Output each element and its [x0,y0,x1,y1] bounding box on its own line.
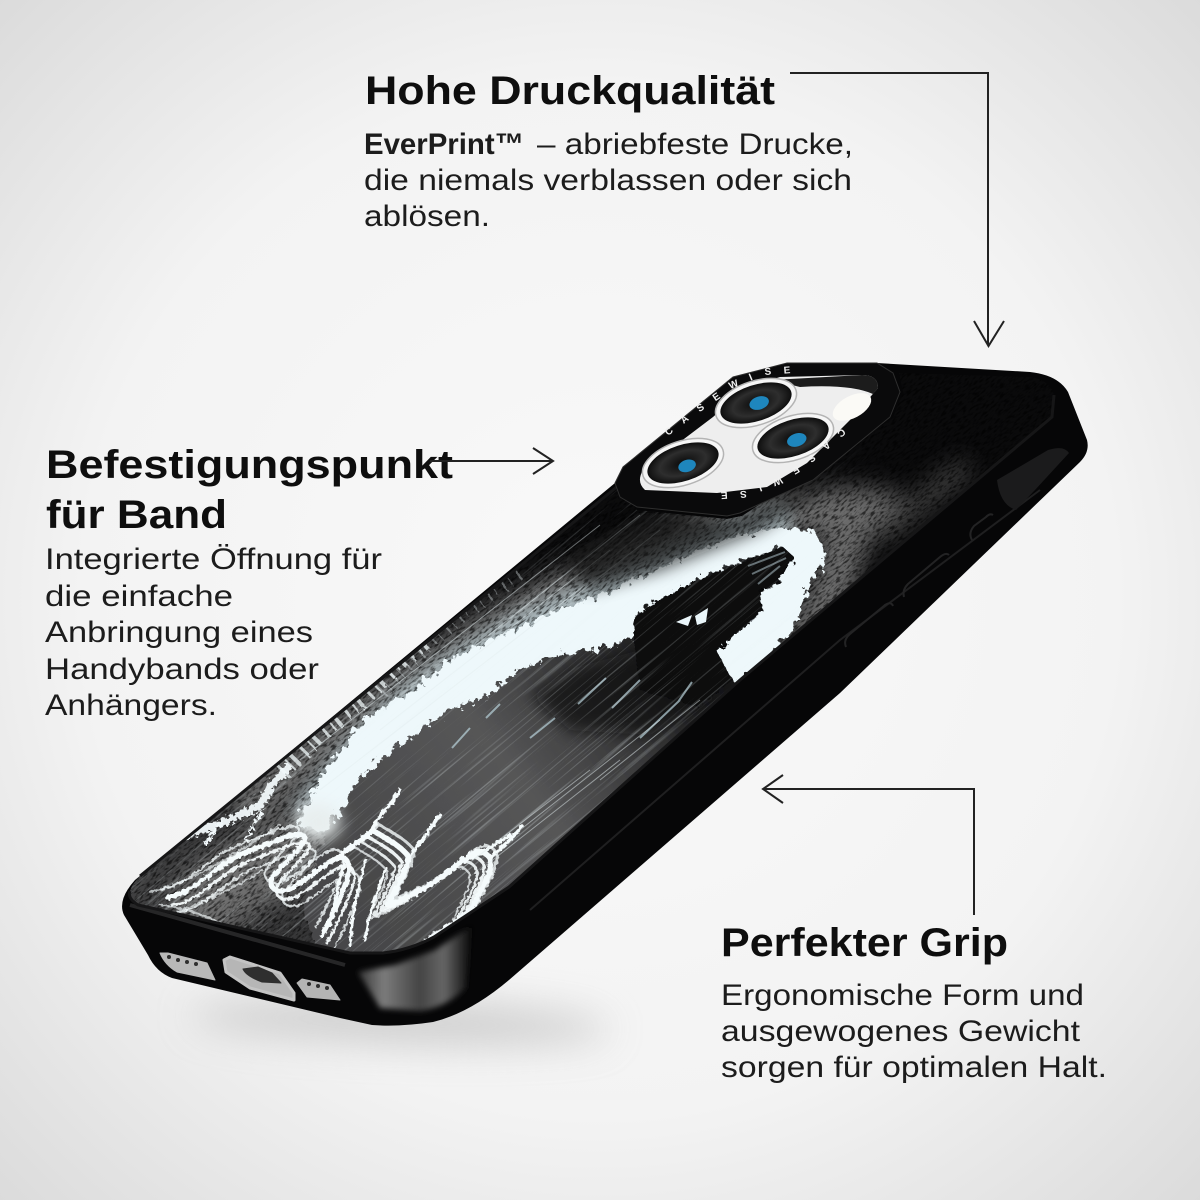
description: Handybands oder [45,653,319,686]
hooded figure [634,547,794,707]
left grill holes [167,955,198,966]
description [721,979,1107,1084]
description: die niemals verblassen oder sich [364,164,852,197]
streak highlights [300,515,700,870]
callout: strap attachment [45,443,453,722]
brand text top: CASEWISE [666,366,790,434]
right grill holes [307,982,329,990]
glow bottom bloom [296,804,340,840]
dark grain over mist [130,448,988,942]
port surround [224,957,294,1000]
rim line [530,490,1040,910]
dark fade near camera [560,470,850,590]
back print artwork [130,449,983,952]
camera control notch [997,448,1069,510]
description [364,128,853,233]
bottom rim band [130,905,345,965]
case corner highlight [358,925,472,1011]
arrow: grip [763,775,974,915]
description: – abriebfeste Drucke, [537,128,853,161]
blue flecks on body [452,678,692,748]
lens left [636,429,730,497]
figure jaw stripes [748,552,786,584]
description: Anbringung eines [45,616,313,649]
dark body shadow [530,650,716,735]
heading: Hohe Druckqualität [365,69,775,113]
glass rim [129,395,1054,953]
description: Ergonomische Form und [721,979,1084,1012]
callout: print quality [364,69,853,233]
camera island [614,362,900,516]
description: Anhängers. [45,689,217,722]
mist halo [210,472,960,900]
port opening [243,967,281,983]
lens right [746,404,840,472]
streak lines [130,460,882,952]
ground below ridge [300,637,745,960]
side buttons [845,514,993,647]
description: EverPrint™ [364,128,524,161]
lens top [709,369,803,437]
flash [828,387,876,427]
wave feather [177,570,520,845]
description: sorgen für optimalen Halt. [721,1051,1107,1084]
window top shadow [772,375,878,394]
case body [122,363,1088,1026]
action button [845,603,893,647]
callout: grip [721,921,1107,1084]
heading: Perfekter Grip [721,921,1008,965]
marbled swirl lines [150,790,522,957]
glow around figure [296,528,826,833]
description: ablösen. [364,200,490,233]
figure eyes [676,608,708,626]
description [45,543,382,722]
heading: für Band [46,493,227,537]
charging port area [160,953,340,1000]
camera window [640,375,878,493]
description: Integrierte Öffnung für [45,543,382,576]
camera ring [615,363,900,516]
volume button [904,554,949,597]
arrow: strap attachment [430,448,553,474]
left speaker grill [160,953,215,980]
heading: Befestigungspunkt [46,443,453,487]
phone case illustration [122,362,1088,1026]
heading [46,443,453,537]
small button [970,514,993,540]
phone drop shadow [189,995,611,1049]
soft glow under band [305,520,790,820]
arrow: print quality [790,73,1004,346]
right speaker grill [297,979,340,1000]
description: die einfache [45,580,233,613]
brand text bottom: CASEWISE [721,430,845,500]
description: ausgewogenes Gewicht [721,1015,1081,1048]
